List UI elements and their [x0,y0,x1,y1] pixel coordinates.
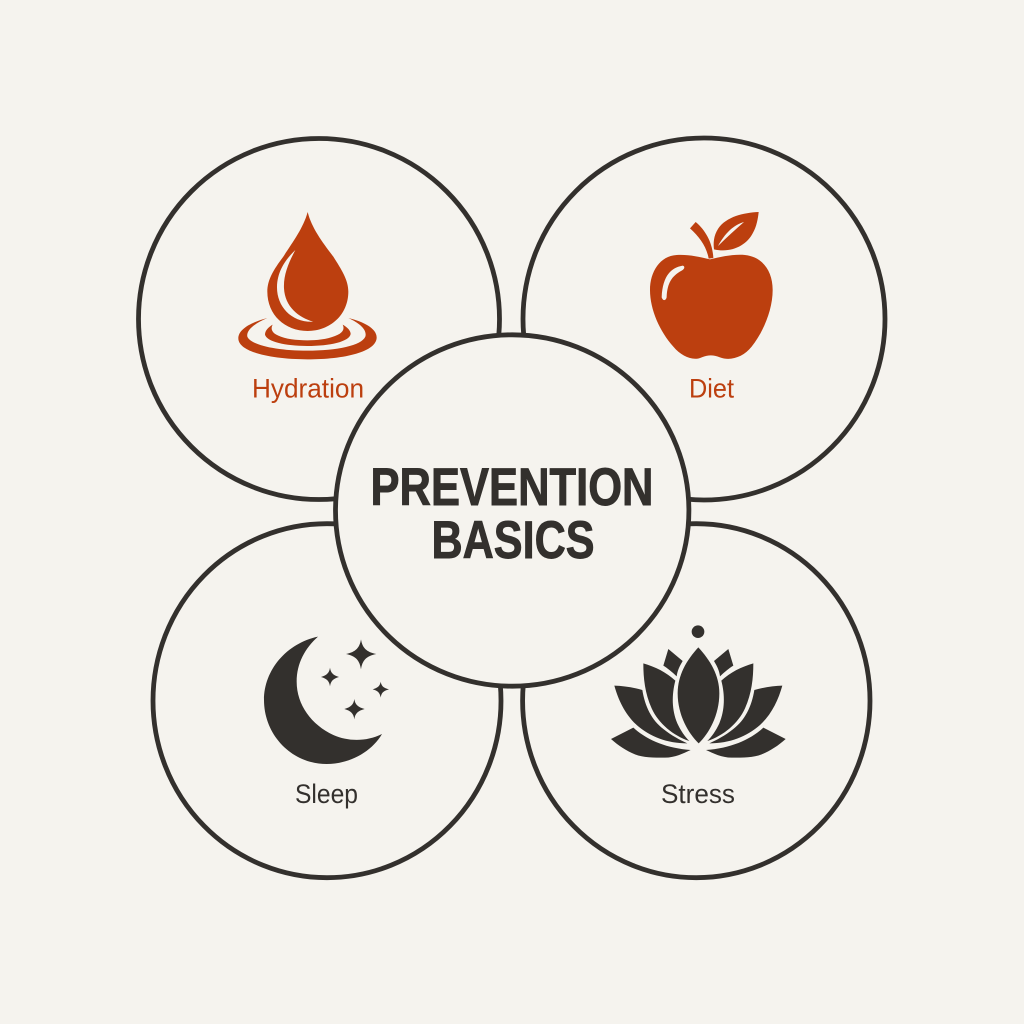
icon: apple [650,212,773,359]
label: hydration: Hydration [252,374,364,404]
circle: center outline [336,335,689,686]
title [370,458,654,570]
circle: stress outline [523,524,870,878]
label: diet: Diet [689,374,734,404]
icon: lotus flower [611,625,786,758]
icon: crescent moon and stars [264,637,389,764]
panel: diet [523,138,885,500]
label: sleep: Sleep [295,779,358,809]
panel: center hub [336,335,689,686]
icon: water drop with ripples [238,212,377,359]
panel: stress [523,524,870,878]
label: stress: Stress [661,779,735,809]
panel: sleep [153,524,501,878]
title: PREVENTION [370,458,654,517]
circle: sleep outline [153,524,501,878]
circle: diet outline [523,138,885,500]
circle: hydration outline [138,138,500,500]
panel: hydration [138,138,500,500]
title: BASICS [432,511,594,570]
